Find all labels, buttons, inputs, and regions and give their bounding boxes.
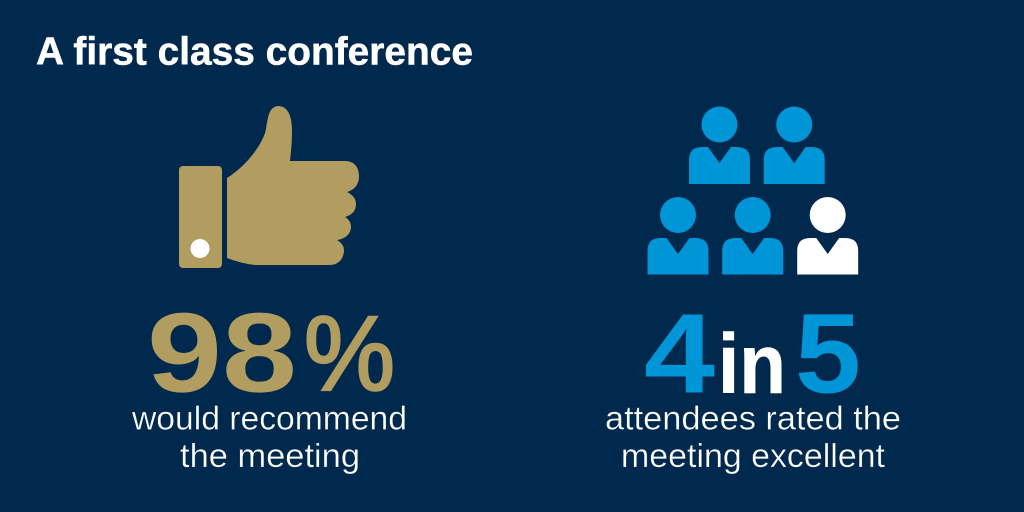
big number: 98%: 98 [147, 290, 297, 416]
person 5: white [797, 197, 858, 274]
big number: 98% [147, 290, 395, 416]
person 4 [722, 197, 783, 274]
caption: attendees rated the meeting excellent: attendees rated the [605, 400, 901, 438]
big number: 98%: % [304, 295, 395, 413]
person 3 [648, 197, 708, 274]
caption: would recommend the meeting: would recommend [131, 400, 407, 438]
big number: 4 in 5: in [718, 317, 786, 411]
title: A first class conference [36, 30, 473, 74]
big number: 4 in 5: 5 [795, 290, 861, 416]
panel: excellent rating stat [605, 106, 901, 475]
caption: would recommend the meeting: the meeting [180, 438, 360, 475]
person 1 [689, 106, 750, 184]
icon: thumbs up [179, 106, 359, 268]
panel: recommendation stat [131, 106, 407, 475]
caption: attendees rated the meeting excellent: meeting excellent [621, 438, 886, 475]
big number: 4 in 5: 4 [644, 290, 715, 416]
big number: 4 in 5 [644, 290, 861, 416]
caption: would recommend the meeting [131, 400, 407, 475]
icon: five people, four blue and one white [648, 106, 858, 274]
person 2 [764, 106, 825, 184]
caption: attendees rated the meeting excellent [605, 400, 901, 475]
